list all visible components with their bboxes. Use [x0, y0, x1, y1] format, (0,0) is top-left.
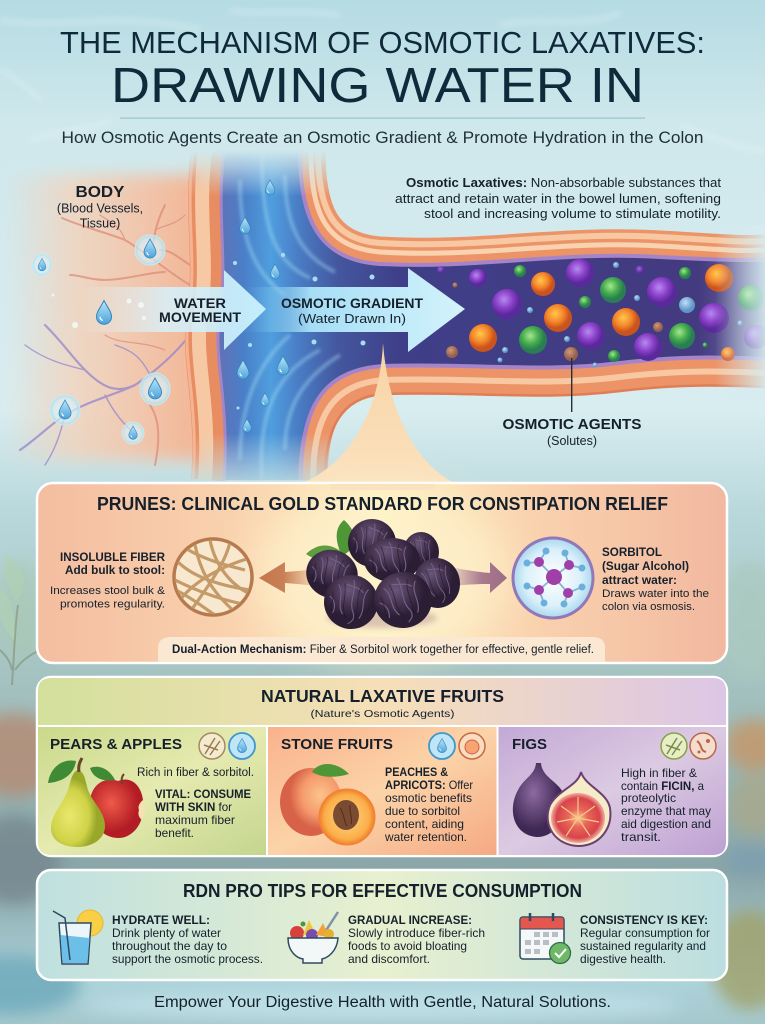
icon: water — [429, 733, 455, 759]
icon: glass of water — [53, 910, 103, 964]
text: sorbitol: Draws water into the — [602, 588, 709, 600]
small bubbles in arrow — [52, 294, 146, 328]
water droplets in lumen — [233, 180, 374, 432]
colon lumen — [214, 150, 765, 480]
footer tagline: Empower Your Digestive Health with Gentle, Natural Solutions. — [154, 994, 611, 1011]
text: figs: enzyme that may — [621, 804, 711, 818]
panel: RDN pro tips — [37, 870, 727, 980]
osmotic agents: solute spheres — [437, 259, 765, 368]
text: figs: High in fiber & — [621, 766, 697, 780]
blood vessels: arterial branches — [62, 205, 190, 465]
label: water movement: MOVEMENT — [159, 310, 242, 325]
text: sorbitol: colon via osmosis. — [602, 601, 695, 613]
icon: fiber strands — [174, 539, 252, 615]
text: consistency is key — [580, 913, 710, 966]
text: insoluble fiber — [50, 550, 166, 610]
label: body: (Blood Vessels, — [57, 202, 143, 216]
title: DRAWING WATER IN — [111, 59, 644, 113]
label: water movement: WATER — [174, 296, 226, 311]
text: pears: benefit. — [155, 826, 194, 840]
image: peach — [280, 764, 375, 845]
card: stone fruits — [268, 727, 496, 855]
label: body: BODY — [76, 184, 125, 201]
heading: PRUNES: CLINICAL GOLD STANDARD FOR CONSTIPATION RELIEF — [97, 494, 668, 514]
label: osmotic gradient: (Water Drawn In) — [298, 312, 406, 326]
dual-action note: Dual-Action Mechanism: Fiber & Sorbitol work together for effective, gentle relief. — [172, 644, 594, 656]
icon: droplets in bubbles — [32, 235, 170, 444]
label: osmotic gradient — [281, 296, 424, 326]
arrow: to sorbitol — [445, 562, 507, 593]
text: pears: maximum fiber — [155, 813, 235, 827]
text: hydrate well: throughout the day to — [112, 939, 227, 953]
heading band — [38, 678, 726, 725]
lumen water currents — [240, 150, 340, 480]
description of osmotic laxatives: attract and retain water in the bowel lumen, softening — [395, 192, 721, 206]
leader line to agents — [571, 358, 572, 412]
card: pears and apples — [38, 727, 266, 855]
text: pears: WITH SKIN for — [155, 800, 232, 814]
icon: enzyme — [690, 733, 716, 759]
text: stone fruits: APRICOTS: Offer — [385, 778, 473, 792]
body tissue region — [5, 175, 205, 465]
text: figs: contain FICIN, a — [621, 779, 704, 793]
text: sorbitol — [602, 545, 709, 613]
icon: calendar — [520, 913, 570, 964]
arrow: water movement — [80, 270, 266, 350]
icon: fiber — [661, 733, 687, 759]
text: insoluble fiber: Add bulk to stool: — [65, 563, 165, 577]
heading: RDN PRO TIPS FOR EFFECTIVE CONSUMPTION — [183, 881, 582, 901]
text: insoluble fiber: INSOLUBLE FIBER — [60, 550, 165, 564]
label: osmotic agents: (Solutes) — [547, 434, 597, 448]
text: gradual increase — [348, 913, 485, 966]
card: figs: FIGS — [512, 736, 547, 753]
upper intestinal wall — [300, 150, 765, 265]
callout pointer — [298, 343, 458, 485]
description of osmotic laxatives: Osmotic Laxatives: Non-absorbable substances that — [406, 176, 722, 190]
text: figs — [621, 766, 711, 844]
heading band: NATURAL LAXATIVE FRUITS — [261, 686, 504, 706]
diagram: water drawn into the colon — [5, 150, 765, 480]
label: body — [57, 184, 143, 230]
icon: peach — [459, 733, 485, 759]
image: fig — [513, 763, 610, 846]
title — [60, 25, 705, 113]
blood vessels: venous branches — [20, 325, 190, 465]
text: hydrate well: Drink plenty of water — [112, 926, 221, 940]
text: figs: transit. — [621, 830, 661, 844]
text: consistency is key: Regular consumption for — [580, 926, 710, 940]
label: osmotic gradient: OSMOTIC GRADIENT — [281, 296, 424, 311]
label: water movement — [159, 296, 242, 325]
panel: natural laxative fruits — [37, 677, 727, 856]
text: sorbitol: SORBITOL — [602, 545, 662, 559]
text: consistency is key: sustained regularity and — [580, 939, 706, 953]
text: stone fruits: PEACHES & — [385, 765, 448, 779]
left intestinal wall — [187, 150, 225, 480]
label: body: Tissue) — [80, 216, 120, 230]
text: hydrate well: support the osmotic process. — [112, 952, 263, 966]
text: figs: aid digestion and — [621, 817, 711, 831]
text: gradual increase: and discomfort. — [348, 952, 430, 966]
text: stone fruits: due to sorbitol — [385, 804, 460, 818]
text: sorbitol: (Sugar Alcohol) — [602, 559, 689, 573]
arrow: to fiber — [259, 562, 320, 593]
subtitle: How Osmotic Agents Create an Osmotic Gradient & Promote Hydration in the Colon — [62, 128, 704, 147]
text: gradual increase: Slowly introduce fiber-rich — [348, 926, 485, 940]
panel: prunes — [37, 483, 727, 663]
text: stone fruits: osmotic benefits — [385, 791, 472, 805]
dual-action note — [158, 637, 605, 662]
text: pears: Rich in fiber & sorbitol. — [137, 767, 254, 779]
icon: fiber — [199, 733, 225, 759]
text: sorbitol: attract water: — [602, 573, 677, 587]
text: pears: VITAL: CONSUME — [155, 787, 251, 801]
icon: fruit bowl — [288, 912, 338, 963]
colon tube with walls — [187, 150, 765, 480]
image: prune cluster — [299, 514, 464, 635]
icon: water — [229, 733, 255, 759]
label: osmotic agents: OSMOTIC AGENTS — [502, 416, 642, 433]
text: consistency is key: digestive health. — [580, 952, 666, 966]
arrow: osmotic gradient — [245, 268, 465, 352]
card: figs — [498, 727, 726, 855]
card: pears and apples: PEARS & APPLES — [50, 736, 182, 753]
text: hydrate well: HYDRATE WELL: — [112, 913, 210, 927]
text: gradual increase: foods to avoid bloating — [348, 939, 467, 953]
text: hydrate well — [112, 913, 263, 966]
text: gradual increase: GRADUAL INCREASE: — [348, 913, 472, 927]
title: THE MECHANISM OF OSMOTIC LAXATIVES: — [60, 25, 705, 60]
text: figs: proteolytic — [621, 791, 676, 805]
image: pear and apple — [48, 758, 145, 847]
heading band: (Nature's Osmotic Agents) — [310, 708, 454, 720]
description of osmotic laxatives: stool and increasing volume to stimulate motility. — [424, 207, 721, 221]
text: insoluble fiber: promotes regularity. — [60, 598, 165, 610]
description of osmotic laxatives — [395, 176, 722, 221]
icon: water drop in arrow — [96, 300, 112, 324]
lower intestinal wall — [301, 358, 765, 480]
text: stone fruits — [384, 765, 473, 844]
label: osmotic agents — [502, 416, 642, 448]
text: pears — [137, 767, 254, 840]
text: stone fruits: water retention. — [384, 830, 467, 844]
icon: sorbitol molecule — [513, 538, 593, 618]
card: stone fruits: STONE FRUITS — [281, 736, 393, 753]
text: insoluble fiber: Increases stool bulk & — [50, 585, 166, 597]
text: consistency is key: CONSISTENCY IS KEY: — [580, 913, 708, 927]
text: stone fruits: content, aiding — [385, 817, 464, 831]
